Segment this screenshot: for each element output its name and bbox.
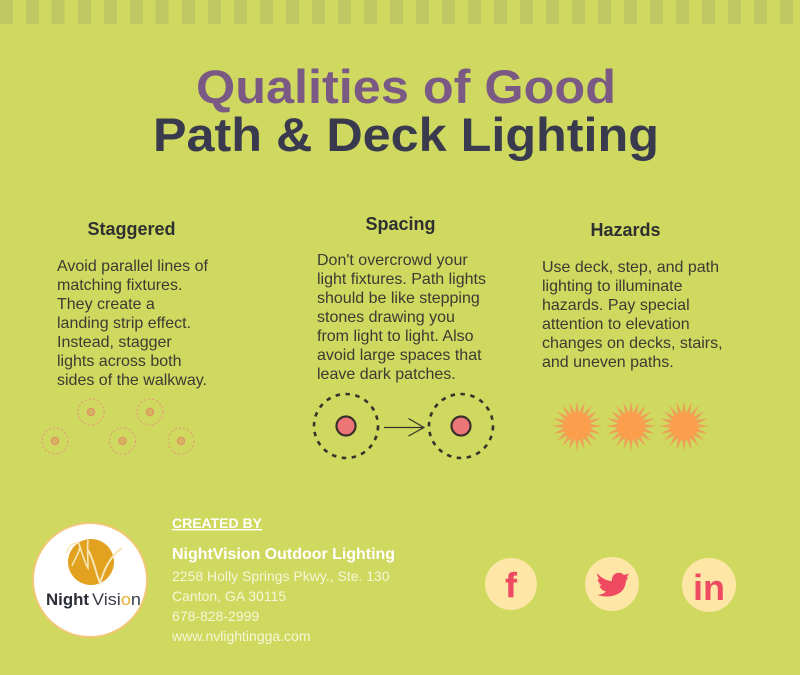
icon: facebook [485, 558, 537, 610]
contact details: Canton, GA 30115 [172, 588, 286, 604]
text block: spacing: Don't overcrowd your [317, 252, 468, 269]
text block: staggered: They create a [57, 296, 155, 313]
logo wordmark: Night [46, 590, 89, 609]
text block: staggered: lights across both [57, 353, 182, 370]
logo emblem [67, 539, 122, 585]
contact details: 678-828-2999 [172, 608, 259, 624]
panel: hazards [542, 220, 723, 451]
company name: NightVision Outdoor Lighting [172, 546, 395, 563]
text block: staggered: Avoid parallel lines of [57, 258, 208, 275]
credits block [171, 515, 395, 644]
text block: spacing: from light to light. Also [317, 328, 474, 345]
heading: hazards: Hazards [590, 220, 661, 240]
text block: spacing: avoid large spaces that [317, 347, 482, 364]
text block: hazards [542, 259, 723, 371]
logo badge [33, 523, 147, 637]
icon: facebook: f [505, 567, 517, 605]
icon: linkedin: in [693, 567, 725, 608]
text block: staggered: Instead, stagger [57, 334, 172, 351]
top striped band [0, 0, 793, 24]
text block: hazards: attention to elevation [542, 316, 690, 333]
panel: staggered [42, 219, 208, 454]
contact details: 2258 Holly Springs Pkwy., Ste. 130 [172, 568, 390, 584]
icon: spaced lights with arrow [314, 394, 493, 458]
text block: staggered: sides of the walkway. [57, 372, 207, 389]
heading: staggered: Staggered [87, 219, 176, 239]
logo wordmark: Vision [92, 590, 141, 609]
text block: hazards: and uneven paths. [542, 354, 674, 371]
text block: spacing: leave dark patches. [317, 366, 456, 383]
text block: hazards: hazards. Pay special [542, 297, 690, 314]
icon: staggered light circles [42, 399, 194, 454]
text block: staggered [57, 258, 208, 389]
title: Qualities of Good [196, 60, 616, 113]
icon: linkedin [682, 558, 736, 612]
icon: three sunbursts [552, 401, 709, 451]
logo wordmark [46, 590, 141, 609]
contact details [171, 568, 390, 644]
panel: spacing [314, 214, 493, 458]
text block: staggered: landing strip effect. [57, 315, 191, 332]
text block: spacing [317, 252, 486, 383]
text block: staggered: matching fixtures. [57, 277, 182, 294]
icon: twitter [585, 557, 639, 611]
title [153, 60, 659, 161]
text block: spacing: light fixtures. Path lights [317, 271, 486, 288]
title: Path & Deck Lighting [153, 108, 659, 161]
text block: hazards: changes on decks, stairs, [542, 335, 723, 352]
text block: hazards: lighting to illuminate [542, 278, 683, 295]
contact details: www.nvlightingga.com [171, 628, 311, 644]
heading: spacing: Spacing [365, 214, 436, 234]
created by heading: CREATED BY [172, 515, 263, 531]
text block: hazards: Use deck, step, and path [542, 259, 719, 276]
text block: spacing: should be like stepping [317, 290, 480, 307]
text block: spacing: stones drawing you [317, 309, 455, 326]
